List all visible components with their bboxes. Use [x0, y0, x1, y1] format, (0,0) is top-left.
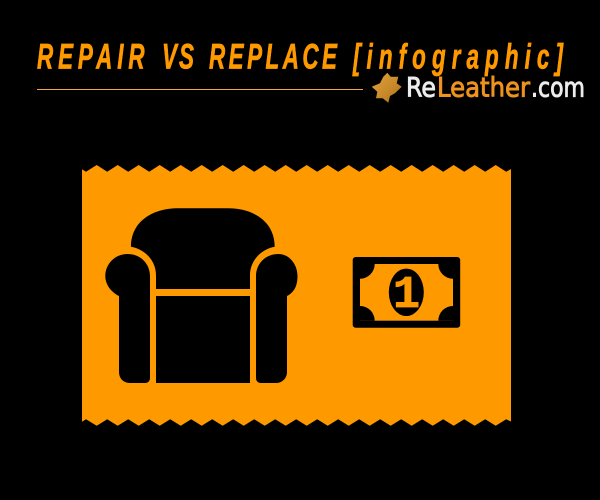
- left arm: [105, 254, 150, 383]
- icon: leather hide: [372, 73, 402, 103]
- logo wordmark: Re: [406, 73, 436, 104]
- logo wordmark: .com: [531, 73, 585, 104]
- icon: dollar bill: [353, 257, 460, 328]
- logo: ReLeather.com: [372, 73, 585, 104]
- bill denomination: 1: [393, 270, 420, 321]
- icon: armchair: [105, 208, 298, 383]
- title: REPAIR: [37, 37, 145, 77]
- logo wordmark: Leather: [437, 73, 531, 104]
- title: [37, 37, 564, 77]
- panel: orange torn-edge panel: [82, 165, 511, 426]
- title: REPLACE: [209, 37, 338, 77]
- bill centre oval: [389, 269, 424, 316]
- title: VS: [162, 37, 194, 77]
- bill inner field: [360, 264, 453, 321]
- title: [infographic]: [352, 37, 564, 77]
- header rule: [37, 89, 363, 90]
- chair seat: [156, 296, 250, 383]
- right arm: [256, 254, 298, 383]
- bill corner notches: [360, 264, 453, 321]
- chair back: [131, 208, 275, 289]
- logo wordmark: [406, 73, 585, 104]
- bill outer: [353, 257, 460, 328]
